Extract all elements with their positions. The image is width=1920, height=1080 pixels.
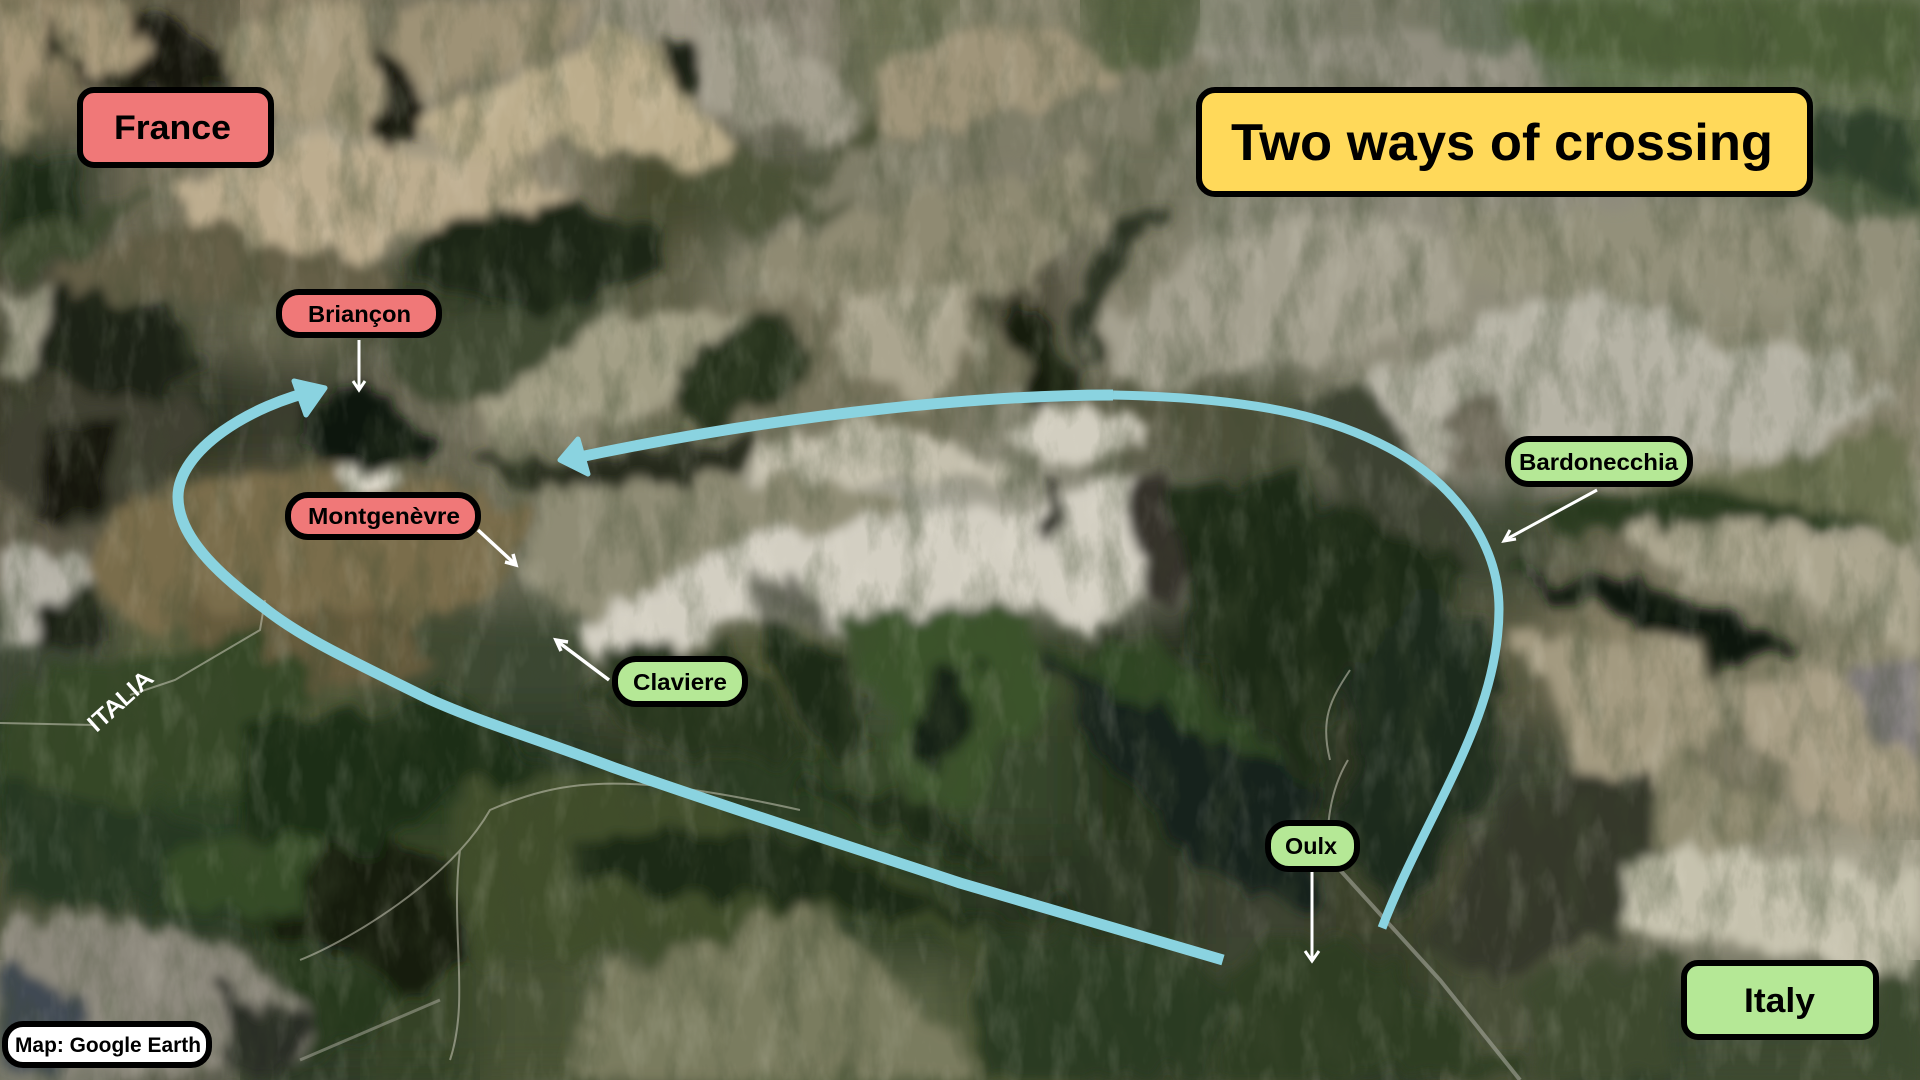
label: France xyxy=(80,90,271,165)
route arrow: long way via Montgenèvre xyxy=(178,381,1223,960)
credit: Map: Google Earth xyxy=(5,1024,209,1065)
label: Italy: Italy xyxy=(1744,982,1815,1020)
label: Oulx: Oulx xyxy=(1285,833,1337,859)
label: Montgenèvre: Montgenèvre xyxy=(308,503,460,529)
arrow: Bardonecchia pointer xyxy=(1504,490,1597,541)
label: Claviere: Claviere xyxy=(633,669,727,695)
map label: ITALIA: ITALIA xyxy=(82,665,158,737)
label: Claviere xyxy=(615,659,745,704)
label: Briançon xyxy=(279,292,439,335)
label: Oulx xyxy=(1268,823,1357,869)
arrow: Briançon pointer xyxy=(353,340,365,390)
label: Briançon: Briançon xyxy=(308,301,411,327)
label: Italy xyxy=(1684,963,1876,1037)
label: Bardonecchia xyxy=(1508,439,1690,484)
title: Two ways of crossing xyxy=(1231,114,1773,172)
credit: Map: Google Earth: Map: Google Earth xyxy=(15,1034,201,1057)
title xyxy=(1199,90,1810,194)
label: France: France xyxy=(114,109,231,147)
arrow: Claviere pointer xyxy=(556,640,609,680)
label: Montgenèvre xyxy=(288,495,478,537)
arrow: Oulx pointer xyxy=(1305,872,1319,961)
arrow: Montgenèvre pointer xyxy=(478,530,516,565)
label: Bardonecchia: Bardonecchia xyxy=(1519,449,1678,475)
route arrow: tunnel via Bardonecchia xyxy=(560,395,1499,928)
